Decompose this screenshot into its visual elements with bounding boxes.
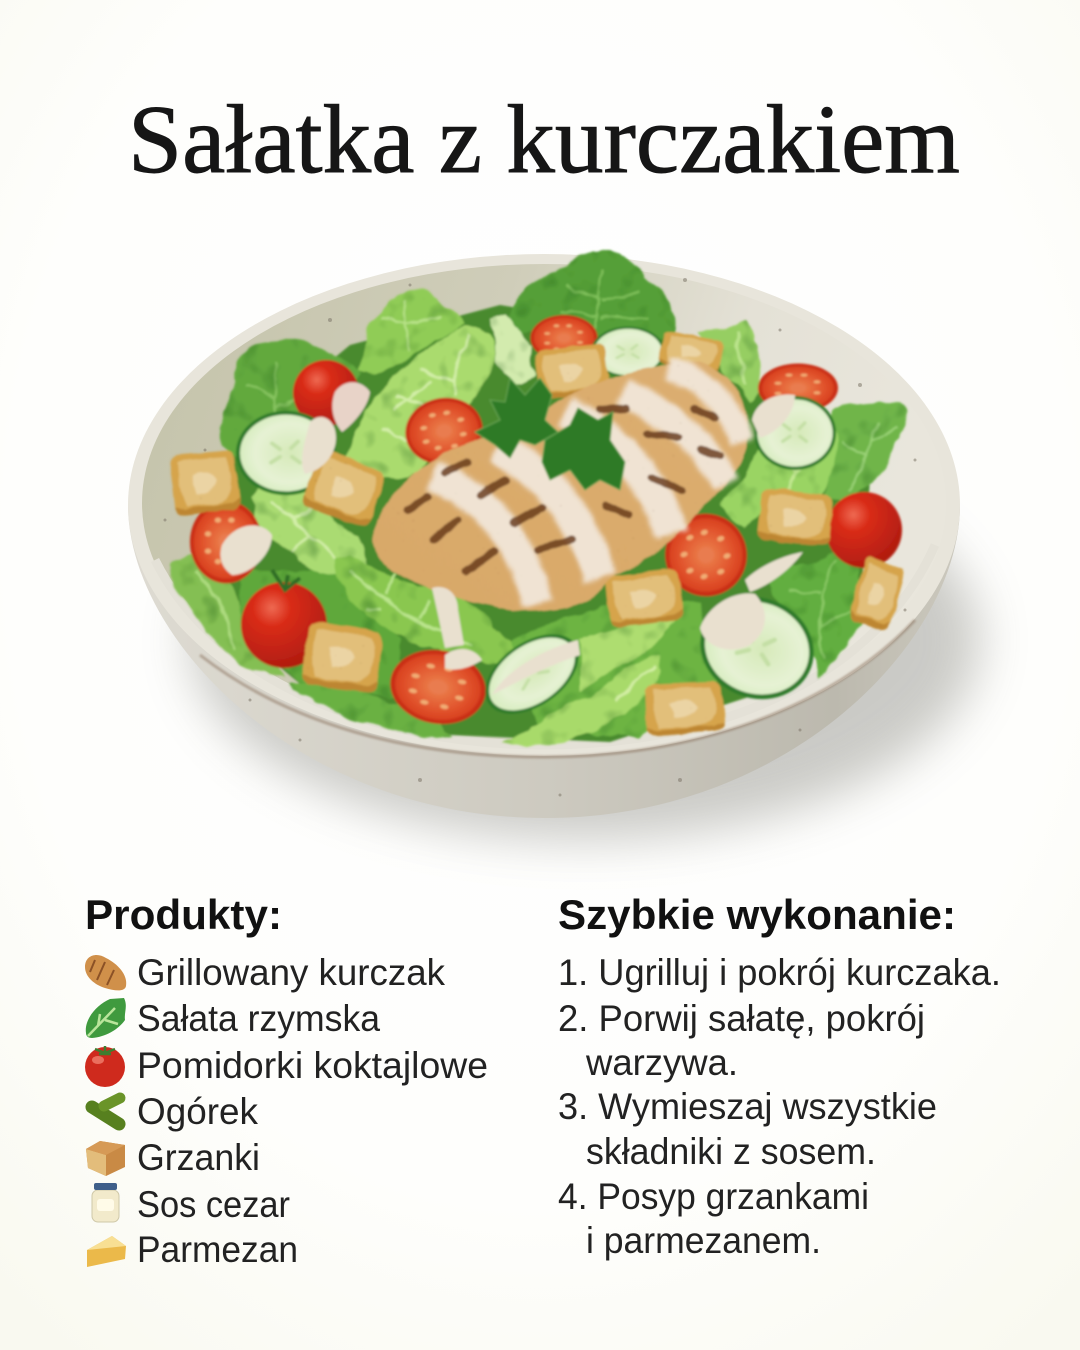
panel: products list bbox=[85, 952, 488, 1270]
croutons bbox=[167, 330, 907, 738]
step 4: i parmezanem. bbox=[586, 1220, 821, 1261]
tomato half: right upper bbox=[758, 364, 838, 412]
lettuce: bottom left leaf bbox=[288, 681, 455, 738]
step 3: składniki z sosem. bbox=[586, 1131, 876, 1172]
tomato half: centre bbox=[400, 392, 488, 470]
crouton: top bbox=[532, 339, 612, 403]
step 3: 3. Wymieszaj wszystkie bbox=[558, 1086, 937, 1127]
step 4 bbox=[558, 1176, 869, 1261]
dressing: caesar drizzles bbox=[220, 394, 803, 695]
tomato half: top bbox=[530, 315, 598, 361]
crouton: bottom bbox=[642, 678, 726, 738]
item: romaine lettuce: Sałata rzymska bbox=[137, 998, 380, 1039]
bowl body bbox=[128, 505, 960, 818]
rim edge shading bbox=[200, 620, 915, 757]
cucumber: lower right bbox=[686, 581, 828, 715]
icon: tomato bbox=[85, 1046, 125, 1087]
lettuce: right top leaf bbox=[700, 322, 761, 400]
crouton: under chicken bbox=[602, 565, 686, 631]
item: cherry tomatoes: Pomidorki koktajlowe bbox=[137, 1045, 488, 1086]
icon: cucumber bbox=[92, 1098, 120, 1124]
item: parmesan: Parmezan bbox=[137, 1229, 298, 1270]
crouton: far left bbox=[167, 445, 243, 519]
icon: sauce jar bbox=[92, 1183, 119, 1222]
step 2: warzywa. bbox=[585, 1042, 738, 1083]
tomato whole: right bbox=[826, 492, 902, 568]
crouton: left middle bbox=[300, 447, 388, 529]
lettuce: left lower leaf bbox=[250, 468, 369, 575]
illustration: salad bowl bbox=[128, 251, 980, 840]
lettuce leaves bbox=[170, 251, 906, 746]
cucumber: left bbox=[236, 411, 336, 495]
lettuce: pale strip by parsley bbox=[490, 315, 535, 385]
tomato whole: lower left bbox=[241, 570, 327, 668]
item: cucumber: Ogórek bbox=[137, 1091, 258, 1132]
bowl interior bbox=[142, 264, 946, 742]
cucumber: right upper bbox=[754, 396, 836, 470]
salad base greens bbox=[200, 305, 870, 742]
bowl shadow bbox=[190, 440, 980, 840]
title: Sałatka z kurczakiem bbox=[128, 86, 960, 193]
tomato half: bottom bbox=[384, 643, 492, 731]
bowl rim bbox=[128, 254, 960, 756]
step 3 bbox=[558, 1086, 937, 1172]
heading: products: Produkty: bbox=[85, 891, 282, 938]
grilled chicken bbox=[373, 362, 748, 611]
parsley garnish bbox=[475, 378, 625, 490]
lettuce: lower left under-leaf bbox=[240, 570, 400, 700]
lettuce: top dark leaf bbox=[505, 251, 675, 345]
tomato half: right of chicken bbox=[654, 502, 758, 608]
crouton: far right bbox=[847, 555, 907, 633]
crouton: top right bbox=[658, 330, 724, 374]
icon: romaine lettuce bbox=[86, 998, 126, 1038]
heading: quick preparation: Szybkie wykonanie: bbox=[558, 891, 956, 938]
lettuce: lower centre under-leaf bbox=[510, 600, 720, 735]
item: croutons: Grzanki bbox=[137, 1137, 260, 1178]
step 4: 4. Posyp grzankami bbox=[558, 1176, 869, 1217]
dressing: on upper left tomato bbox=[332, 382, 370, 432]
panel: preparation steps bbox=[558, 952, 1001, 1261]
step 2: 2. Porwij sałatę, pokrój bbox=[558, 998, 925, 1039]
cucumber: bottom centre bbox=[471, 618, 593, 730]
tomato whole: upper left bbox=[293, 360, 359, 426]
lettuce: far left leaf bbox=[170, 555, 282, 678]
tomato half: left bbox=[190, 501, 262, 583]
lettuce: centre pale leaf bbox=[345, 326, 494, 478]
lettuce: centre left leaf bbox=[334, 555, 520, 665]
icon: crouton bbox=[86, 1141, 125, 1176]
item: grilled chicken: Grillowany kurczak bbox=[137, 952, 445, 993]
bowl inner lip bbox=[155, 545, 935, 745]
step 1: 1. Ugrilluj i pokrój kurczaka. bbox=[558, 952, 1001, 993]
lettuce: right middle light leaf bbox=[720, 424, 834, 530]
step 2 bbox=[558, 998, 925, 1083]
crouton: right bbox=[757, 488, 833, 546]
lettuce: right bottom leaf bbox=[770, 545, 862, 682]
icon: grilled chicken bbox=[85, 955, 126, 990]
icon: parmesan bbox=[87, 1236, 126, 1267]
cucumber: top bbox=[591, 326, 665, 378]
ceramic speckles bbox=[164, 278, 916, 796]
crouton: lower left bbox=[301, 621, 383, 693]
lettuce: left dark leaf bbox=[220, 339, 362, 458]
lettuce: top left leaf bbox=[358, 288, 465, 375]
bowl ceramic bbox=[128, 254, 960, 818]
item: caesar sauce: Sos cezar bbox=[137, 1184, 290, 1225]
lettuce: bottom middle leaf bbox=[500, 605, 674, 746]
lettuce: right dark leaf bbox=[825, 400, 906, 502]
